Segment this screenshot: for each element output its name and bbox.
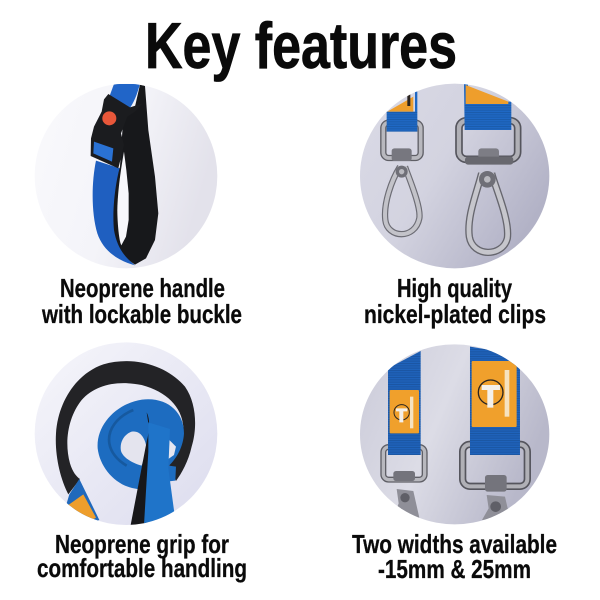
photo: two swivel clips [360,84,549,268]
caption: neoprene handle: Neoprene handle [60,273,225,303]
panel: neoprene handle [35,84,242,329]
photo: coiled lead with neoprene grip [35,342,217,525]
caption: neoprene handle: with lockable buckle [41,299,242,329]
panel: neoprene grip [35,342,247,583]
photo: 15mm and 25mm straps [360,344,549,524]
caption: neoprene grip [37,529,247,583]
caption: clips: nickel-plated clips [364,299,546,329]
caption: two widths [352,529,557,584]
panel: two widths [352,344,557,584]
caption: clips [364,273,546,329]
caption: neoprene grip: Neoprene grip for [55,529,229,559]
caption: clips: High quality [397,273,512,303]
panel: nickel-plated clips [360,84,549,329]
caption: neoprene grip: comfortable handling [37,553,247,583]
caption: neoprene handle [41,273,242,329]
caption: two widths: -15mm & 25mm [378,554,531,584]
title: Key features [145,9,457,82]
photo: handle with lockable buckle [35,84,217,268]
